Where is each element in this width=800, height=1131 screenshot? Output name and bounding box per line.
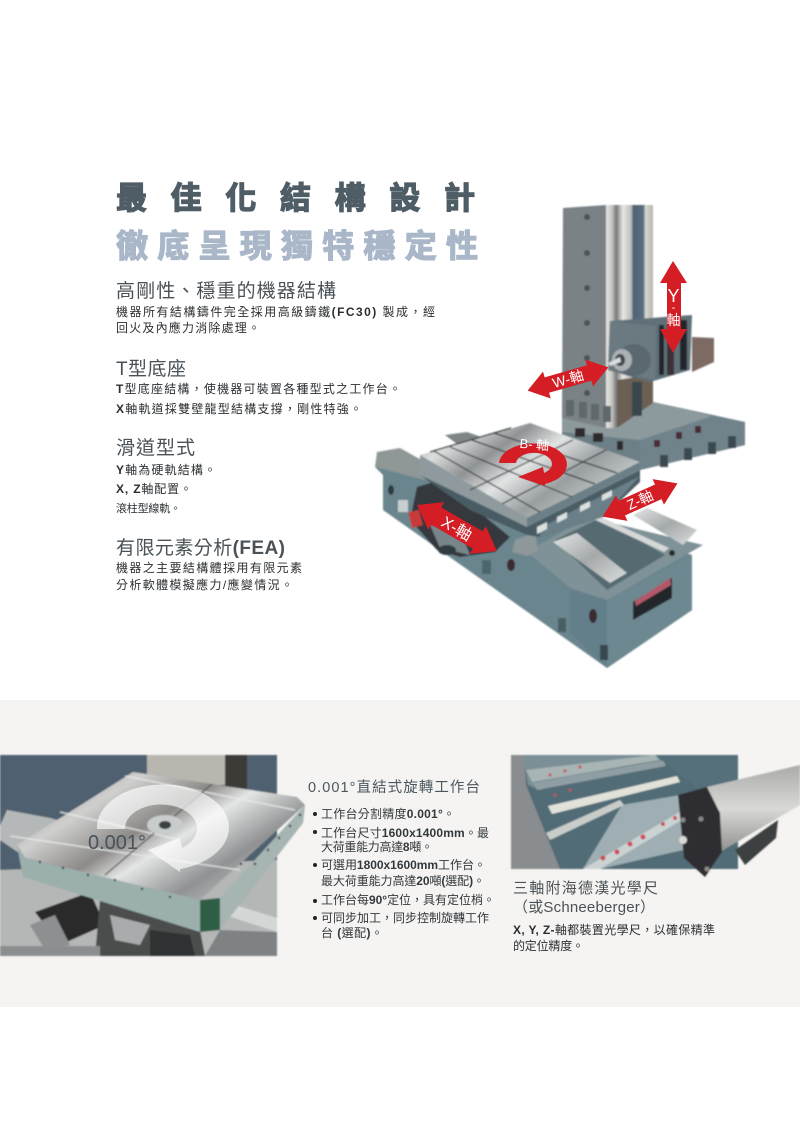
- text block: rigid structure: [116, 280, 435, 335]
- rotary table: [420, 423, 640, 537]
- text block: rotary table: 可選用1800x1600mm工作台。: [321, 857, 486, 872]
- arrow: X axis: X-軸: [438, 513, 475, 545]
- text block: rigid structure: 機器所有結構鑄件完全採用高級鑄鐵(FC30) 製成，經: [116, 304, 435, 319]
- text block: FEA: [116, 537, 302, 592]
- controls cluster: [398, 480, 510, 557]
- text block: T-base: [116, 358, 401, 416]
- text block: T-base: T型底座: [116, 358, 186, 380]
- text block: slideway: Y軸為硬軌結構。: [116, 462, 216, 477]
- text block: slideway: [116, 437, 216, 515]
- text block: rotary table: 可同步加工，同步控制旋轉工作: [321, 910, 489, 925]
- machine illustration: [375, 205, 745, 668]
- arrow: Z axis: [597, 471, 683, 529]
- text block: linear scale: 的定位精度。: [513, 938, 584, 953]
- panel: rotary table photo: [0, 755, 305, 956]
- side rail behind table: [375, 432, 490, 480]
- text block: rotary table: 台 (選配)。: [321, 925, 383, 940]
- text block: slideway: 滾柱型線軌。: [116, 501, 181, 515]
- arrow: X axis: [409, 491, 505, 565]
- rear base: [562, 402, 745, 470]
- arrow: Y axis: 軸: [666, 312, 680, 328]
- title: 最佳化結構設計: [116, 181, 475, 216]
- text block: FEA: 機器之主要結構體採用有限元素: [116, 560, 302, 575]
- text block: T-base: T型底座結構，使機器可裝置各種型式之工作台。: [116, 381, 401, 396]
- bottom background band: [0, 700, 800, 1007]
- text block: linear scale: 三軸附海德漢光學尺: [513, 879, 658, 897]
- spindle head: [608, 315, 714, 382]
- text block: rotary table: 最大荷重能力高達20噸(選配)。: [321, 873, 485, 888]
- icon: rotation arrow: [97, 784, 229, 872]
- linear scale: [707, 765, 800, 852]
- column: [562, 205, 653, 428]
- arrow: Y axis: [660, 261, 687, 353]
- arrow: B axis rotation: [499, 436, 567, 486]
- arrow: Z axis: Z-軸: [624, 487, 656, 513]
- arrow: B axis rotation: B- 軸: [519, 436, 550, 453]
- arrow: Y axis: -: [672, 302, 676, 314]
- text block: linear scale: X, Y, Z-軸都裝置光學尺，以確保精準: [513, 922, 715, 937]
- text block: rotary table: [308, 779, 495, 940]
- title: [116, 181, 478, 264]
- text block: T-base: X軸軌道採雙壁龍型結構支撐，剛性特強。: [116, 401, 362, 416]
- label: 0.001 degree: 0.001°: [88, 832, 146, 854]
- arrow: W axis: W-軸: [551, 367, 585, 391]
- text block: rotary table: 大荷重能力高達8噸。: [321, 839, 433, 854]
- text block: linear scale: [513, 879, 715, 953]
- text block: slideway: 滑道型式: [116, 437, 195, 459]
- text block: rotary table: 工作台分割精度0.001°。: [321, 806, 455, 821]
- text block: slideway: X, Z軸配置。: [116, 482, 192, 496]
- arrow: Y axis: Y: [667, 286, 680, 306]
- text block: rotary table: 工作台每90°定位，具有定位梢。: [321, 892, 495, 907]
- text block: linear scale: （或Schneeberger）: [513, 899, 655, 916]
- title: 徹底呈現獨特穩定性: [116, 228, 478, 264]
- panel: linear scale photo: [511, 755, 800, 877]
- text block: rigid structure: 回火及內應力消除處理。: [116, 320, 260, 335]
- text block: rigid structure: 高剛性、穩重的機器結構: [116, 280, 336, 302]
- text block: rotary table: 工作台尺寸1600x1400mm。最: [321, 825, 489, 840]
- arrow: W axis: [524, 354, 612, 404]
- text block: rotary table: 0.001°直結式旋轉工作台: [308, 779, 480, 796]
- lower base: [375, 467, 692, 668]
- text block: FEA: 分析軟體模擬應力/應變情況。: [116, 577, 293, 592]
- text block: FEA: 有限元素分析(FEA): [116, 537, 285, 559]
- z rails: [512, 508, 703, 600]
